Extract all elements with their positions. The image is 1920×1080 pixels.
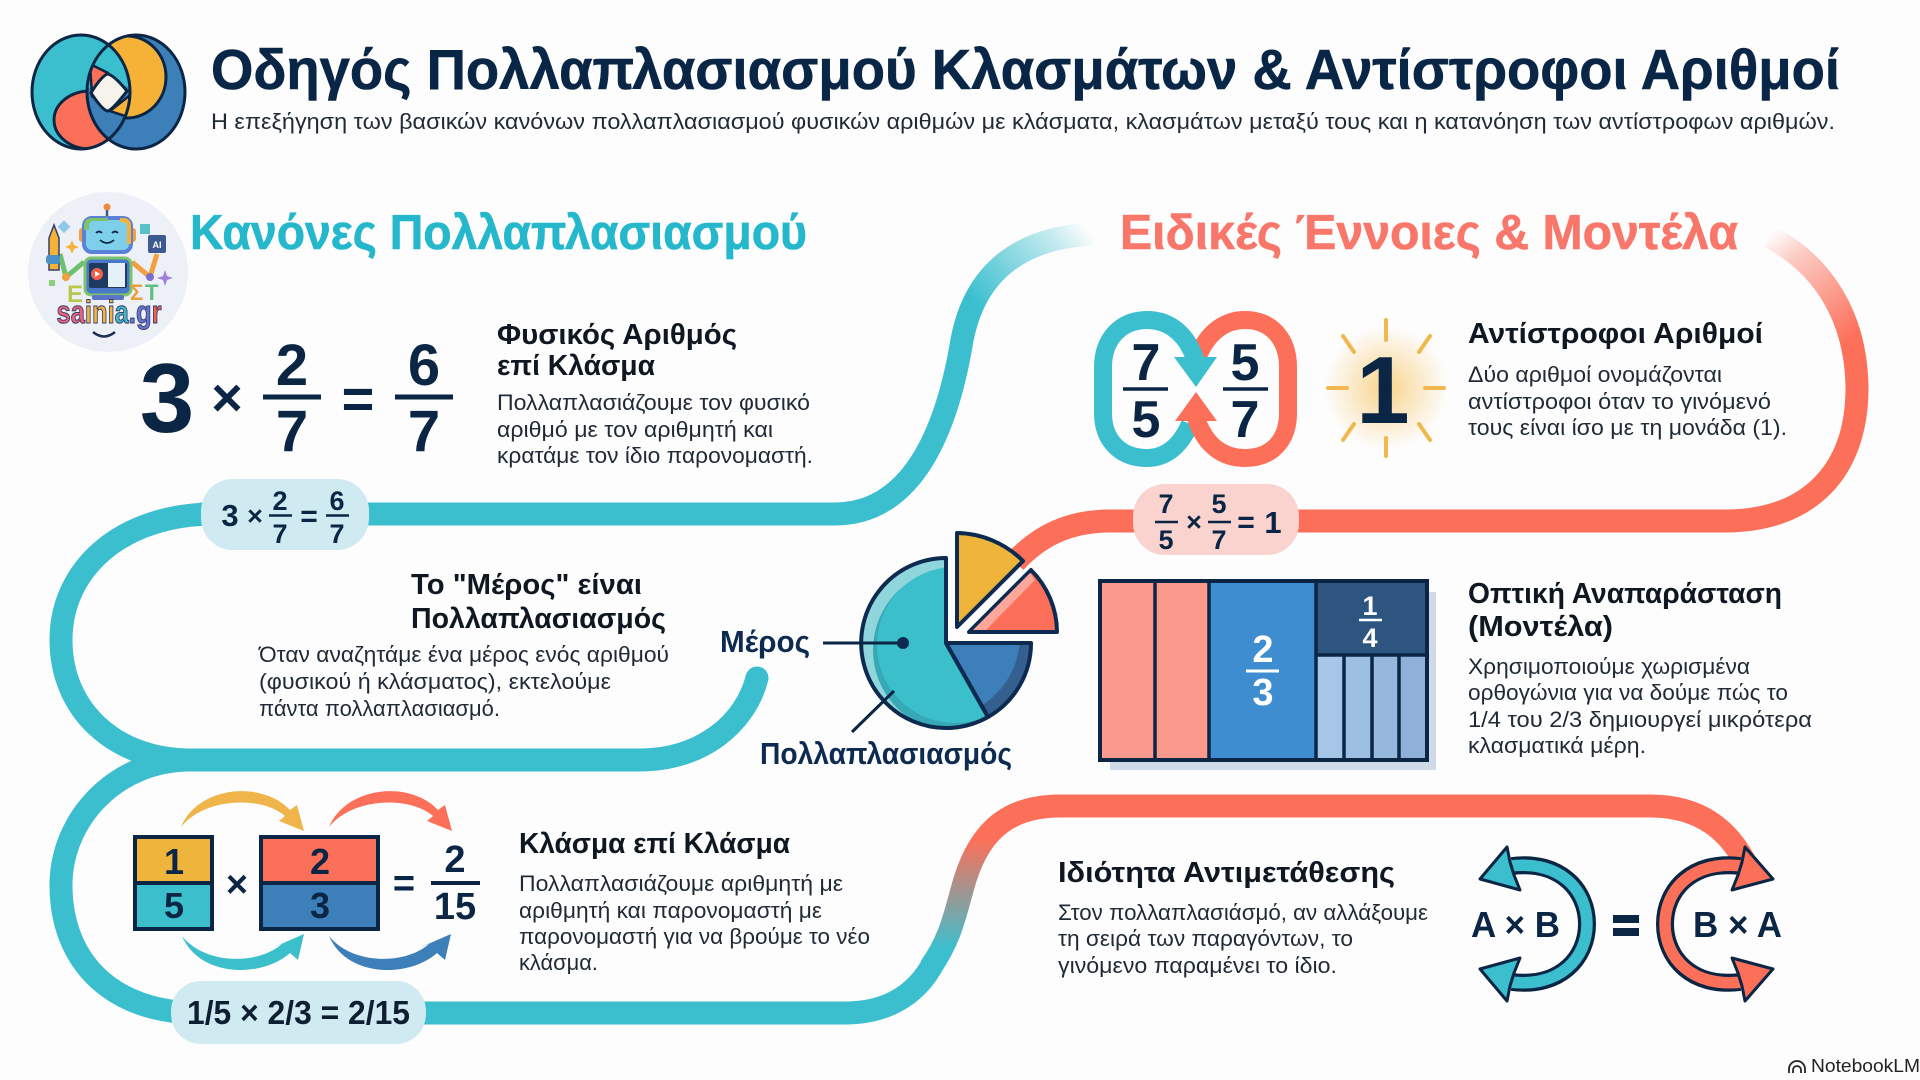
text block: part is multiplication <box>258 569 669 721</box>
text block: part is multiplication: (φυσικού ή κλάσματος), εκτελούμε <box>259 669 611 694</box>
big formula: 3 x 2/7 = 6/7: = <box>342 367 374 430</box>
text block: part is multiplication: πάντα πολλαπλασιασμό. <box>259 696 500 721</box>
badge: sainia.gr robot <box>28 192 188 352</box>
text block: visual models: Χρησιμοποιούμε χωρισμένα <box>1468 654 1750 679</box>
icon: reciprocal fractions loop: 5 <box>1231 334 1259 392</box>
badge: sainia.gr robot: Τ <box>145 280 159 305</box>
icon: fraction by fraction boxes: × <box>226 864 248 906</box>
text block: visual models: ορθογώνια για να δούμε πώς το <box>1468 680 1788 705</box>
icon: reciprocal fractions loop: 5 <box>1132 391 1160 449</box>
subtitle: Η επεξήγηση των βασικών κανόνων πολλαπλασιασμού φυσικών αριθμών με κλάσματα, κλασμάτων μεταξύ τους και η κατανόηση των αντίστροφων αριθμών. <box>211 109 1835 134</box>
text block: reciprocals: τους είναι ίσο με τη μονάδα (1). <box>1468 415 1787 440</box>
pie chart with labels: Μέρος <box>720 624 810 659</box>
badge: sainia.gr robot: sainia.gr <box>56 294 162 330</box>
text block: commutative property: τη σειρά των παραγόντων, το <box>1058 926 1353 951</box>
big formula: 3 x 2/7 = 6/7: × <box>211 368 243 428</box>
icon: glowing number one <box>1324 320 1448 456</box>
text block: reciprocals <box>1468 318 1787 440</box>
pill: 3 x 2/7 = 6/7: 6 <box>329 486 345 516</box>
gradient connector <box>930 806 1060 968</box>
badge: sainia.gr robot: AI <box>152 240 162 250</box>
icon: commutative A x B = B x A: B × A <box>1693 904 1782 945</box>
big formula: 3 x 2/7 = 6/7: 7 <box>408 399 440 464</box>
icon: fraction by fraction boxes: 1 <box>164 841 184 882</box>
icon: commutative A x B = B x A <box>1471 847 1782 1001</box>
pill: 3 x 2/7 = 6/7: 2 <box>272 486 288 516</box>
pill: 7/5 x 5/7 = 1 <box>1133 484 1299 555</box>
section heading: special concepts: Ειδικές Έννοιες & Μοντέλα <box>1120 206 1738 260</box>
text block: fraction by fraction: κλάσμα. <box>519 950 598 975</box>
area model: divided rectangle: 4 <box>1362 623 1378 653</box>
big formula: 3 x 2/7 = 6/7 <box>140 333 453 464</box>
text block: visual models <box>1468 578 1812 758</box>
arrow: numerators coral <box>329 791 452 831</box>
icon: glowing number one: 1 <box>1356 337 1410 444</box>
watermark: NotebookLM: NotebookLM <box>1811 1056 1920 1076</box>
pill: 7/5 x 5/7 = 1: 7 <box>1211 525 1227 555</box>
arrow: denominators blue <box>329 934 451 970</box>
text block: commutative property: Στον πολλαπλασιάσμό, αν αλλάξουμε <box>1058 900 1428 925</box>
pill: 3 x 2/7 = 6/7: × <box>247 501 263 531</box>
text block: visual models: 1/4 του 2/3 δημιουργεί μικρότερα <box>1468 707 1812 732</box>
pie chart with labels: Πολλαπλασιασμός <box>760 736 1012 771</box>
pill: 1/5 x 2/3 = 2/15 <box>171 981 426 1044</box>
text block: whole number by fraction: Φυσικός Αριθμός <box>497 319 737 351</box>
pill: 7/5 x 5/7 = 1: × <box>1186 507 1202 537</box>
text block: fraction by fraction: Πολλαπλασιάζουμε αριθμητή με <box>519 871 843 896</box>
big formula: 3 x 2/7 = 6/7: 3 <box>140 343 194 453</box>
text block: visual models: Οπτική Αναπαράσταση <box>1468 578 1782 610</box>
teal to coral flow path: bottom <box>61 760 935 1013</box>
icon: fraction by fraction boxes: = <box>393 863 415 905</box>
text block: reciprocals: αντίστροφοι όταν το γινόμενό <box>1468 389 1771 414</box>
text block: commutative property: Ιδιότητα Αντιμετάθεσης <box>1058 857 1395 889</box>
section heading: rules: Κανόνες Πολλαπλασιασμού <box>190 206 807 260</box>
pill: 3 x 2/7 = 6/7 <box>201 479 369 550</box>
pill: 3 x 2/7 = 6/7: 3 <box>221 498 239 533</box>
area model: divided rectangle: 3 <box>1252 672 1274 714</box>
icon: commutative A x B = B x A: A × B <box>1471 904 1560 945</box>
text block: whole number by fraction: αριθμό με τον αριθμητή και <box>497 417 773 442</box>
text block: part is multiplication: Το "Μέρος" είναι <box>411 569 642 601</box>
text block: fraction by fraction: Κλάσμα επί Κλάσμα <box>519 828 790 860</box>
area model: divided rectangle <box>1100 581 1436 770</box>
arrow: numerators yellow <box>181 791 304 831</box>
text block: reciprocals: Αντίστροφοι Αριθμοί <box>1468 318 1763 350</box>
text block: whole number by fraction <box>497 319 813 468</box>
big formula: 3 x 2/7 = 6/7: 7 <box>276 399 308 464</box>
text block: whole number by fraction: επί Κλάσμα <box>497 350 655 382</box>
pie chart with labels <box>720 533 1057 771</box>
area model: divided rectangle: 1 <box>1362 591 1378 621</box>
area model: divided rectangle: 2 <box>1252 629 1274 671</box>
big formula: 3 x 2/7 = 6/7: 6 <box>408 333 440 398</box>
text block: fraction by fraction: αριθμητή και παρονομαστή με <box>519 898 822 923</box>
text block: whole number by fraction: κρατάμε τον ίδιο παρονομαστή. <box>497 443 813 468</box>
icon: fraction by fraction boxes <box>135 791 480 970</box>
title: Οδηγός Πολλαπλασιασμού Κλασμάτων & Αντίστροφοι Αριθμοί <box>211 38 1840 102</box>
pill: 7/5 x 5/7 = 1: 5 <box>1211 489 1227 519</box>
pill: 7/5 x 5/7 = 1: = <box>1237 506 1255 539</box>
coral flow path: fading top <box>1768 236 1857 390</box>
text block: visual models: κλασματικά μέρη. <box>1468 733 1646 758</box>
icon: fraction by fraction boxes: 3 <box>310 885 330 926</box>
text block: fraction by fraction <box>519 828 870 975</box>
pill: 3 x 2/7 = 6/7: = <box>300 500 318 533</box>
pill: 7/5 x 5/7 = 1: 1 <box>1264 505 1282 540</box>
logo: overlapping circles <box>32 35 185 160</box>
icon: fraction by fraction boxes: 2 <box>444 839 466 881</box>
pill: 3 x 2/7 = 6/7: 7 <box>329 519 345 549</box>
text block: visual models: (Μοντέλα) <box>1468 611 1613 643</box>
pill: 1/5 x 2/3 = 2/15: 1/5 × 2/3 = 2/15 <box>187 994 410 1031</box>
icon: reciprocal fractions loop: 7 <box>1231 391 1259 449</box>
teal flow path: middle loop <box>61 514 757 760</box>
badge: sainia.gr robot: Σ <box>130 280 143 305</box>
teal flow path: top connector <box>200 234 1092 514</box>
text block: commutative property <box>1058 857 1428 978</box>
big formula: 3 x 2/7 = 6/7: 2 <box>276 333 308 398</box>
pill: 7/5 x 5/7 = 1: 7 <box>1158 489 1174 519</box>
arrow: denominators teal <box>182 934 304 970</box>
pill: 3 x 2/7 = 6/7: 7 <box>272 519 288 549</box>
text block: part is multiplication: Πολλαπλασιασμός <box>411 603 666 635</box>
text block: fraction by fraction: παρονομαστή για να βρούμε το νέο <box>519 924 870 949</box>
coral flow path: upper <box>1015 388 1857 562</box>
badge: sainia.gr robot: Ε <box>67 281 83 308</box>
icon: reciprocal fractions loop: 7 <box>1132 334 1160 392</box>
text block: commutative property: γινόμενο παραμένει το ίδιο. <box>1058 953 1337 978</box>
icon: fraction by fraction boxes: 15 <box>434 886 476 928</box>
icon: fraction by fraction boxes: 2 <box>310 841 330 882</box>
text block: part is multiplication: Όταν αναζητάμε ένα μέρος ενός αριθμού <box>258 642 669 667</box>
coral flow path: bottom top run <box>1055 806 1748 868</box>
pill: 7/5 x 5/7 = 1: 5 <box>1158 525 1174 555</box>
icon: reciprocal fractions loop <box>1103 320 1288 458</box>
text block: reciprocals: Δύο αριθμοί ονομάζονται <box>1468 362 1722 387</box>
text block: whole number by fraction: Πολλαπλασιάζουμε τον φυσικό <box>497 390 810 415</box>
icon: fraction by fraction boxes: 5 <box>164 885 184 926</box>
